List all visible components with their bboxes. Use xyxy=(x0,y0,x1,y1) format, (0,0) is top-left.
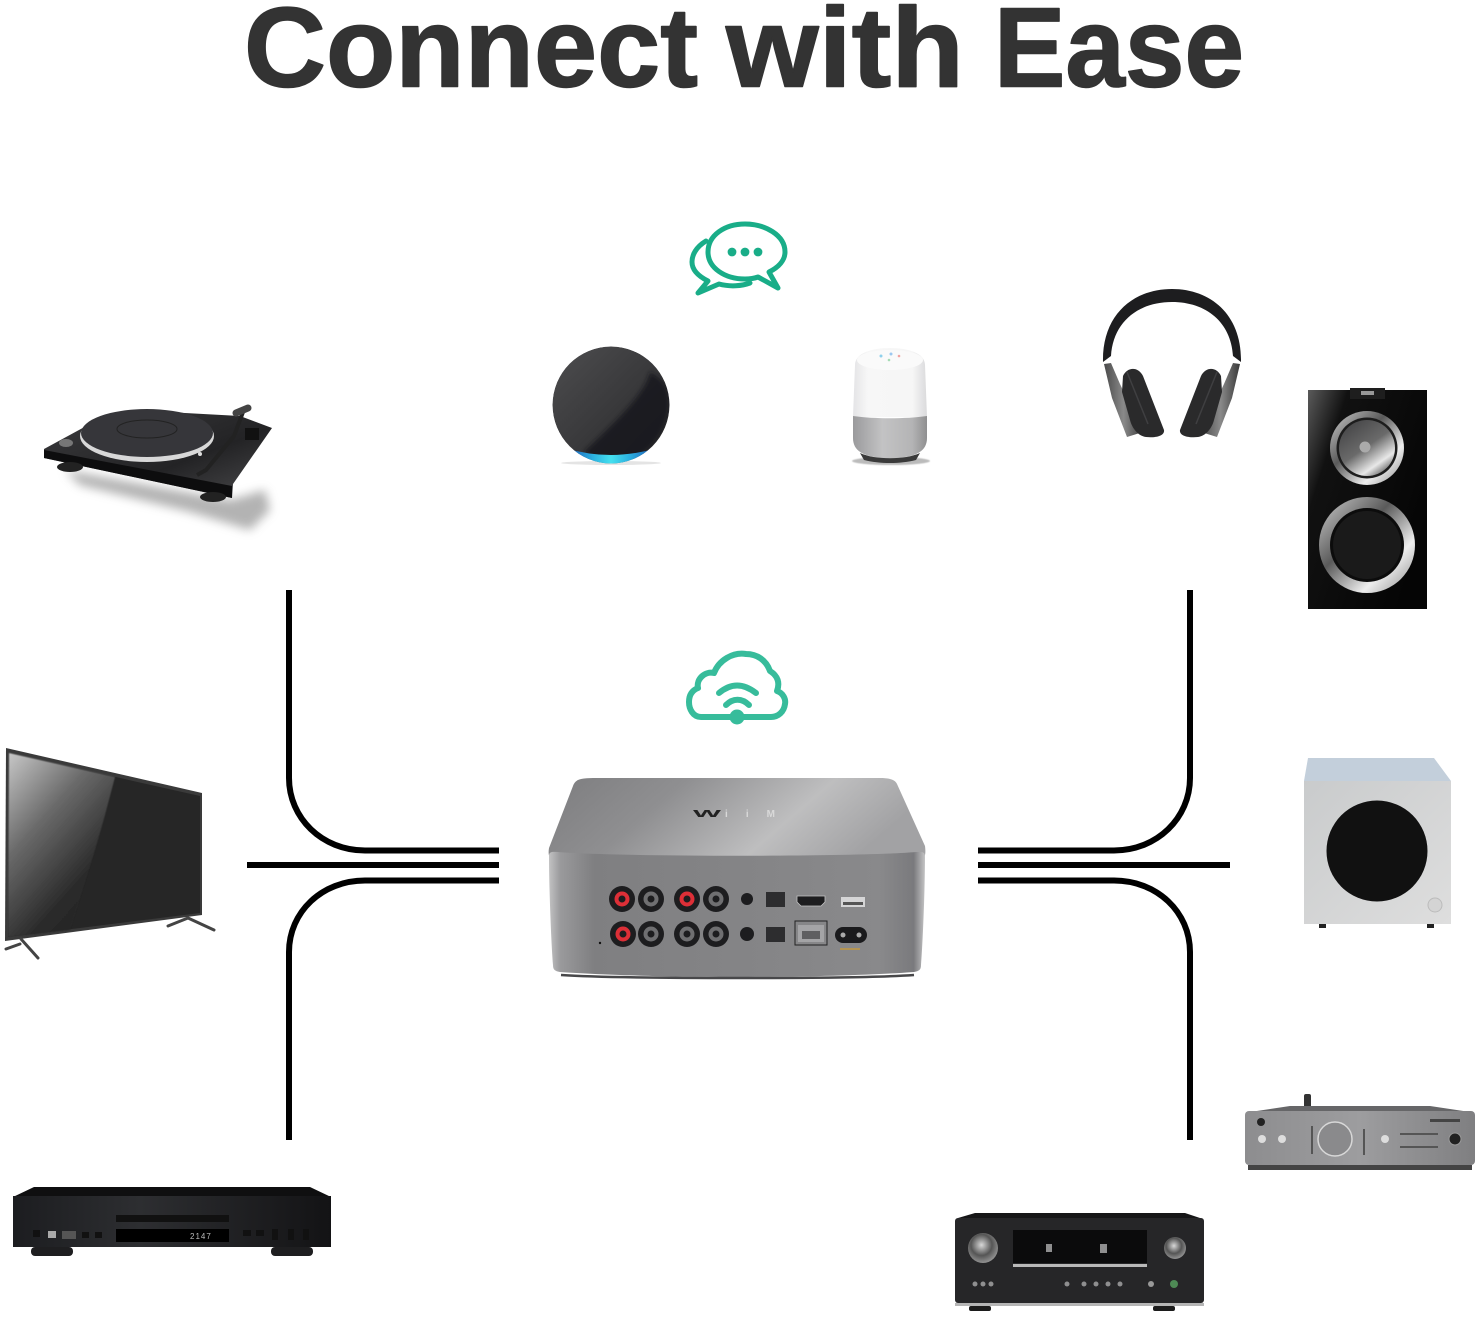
subwoofer xyxy=(1304,758,1451,928)
television xyxy=(5,748,214,958)
icon: wifi cloud xyxy=(689,654,785,724)
logo mark: iiM xyxy=(725,809,775,820)
smart speaker: cylinder xyxy=(852,348,930,465)
headphones xyxy=(1103,289,1241,437)
smart speaker: sphere xyxy=(552,346,670,470)
cd player: 2147 xyxy=(190,1232,212,1241)
jacks and digital ports xyxy=(599,892,867,950)
cd player xyxy=(13,1187,331,1256)
av receiver xyxy=(955,1213,1204,1311)
connection lines: left xyxy=(247,590,499,1140)
title xyxy=(244,0,1244,110)
logo mark: W xyxy=(693,809,723,820)
turntable xyxy=(44,408,272,530)
dac amplifier xyxy=(1245,1094,1475,1170)
logo mark xyxy=(693,809,775,820)
bookshelf speaker xyxy=(1308,388,1427,609)
icon: chat bubbles xyxy=(692,224,785,293)
central streamer xyxy=(549,778,925,978)
connection lines: right xyxy=(978,590,1230,1140)
RCA sockets xyxy=(609,886,729,947)
